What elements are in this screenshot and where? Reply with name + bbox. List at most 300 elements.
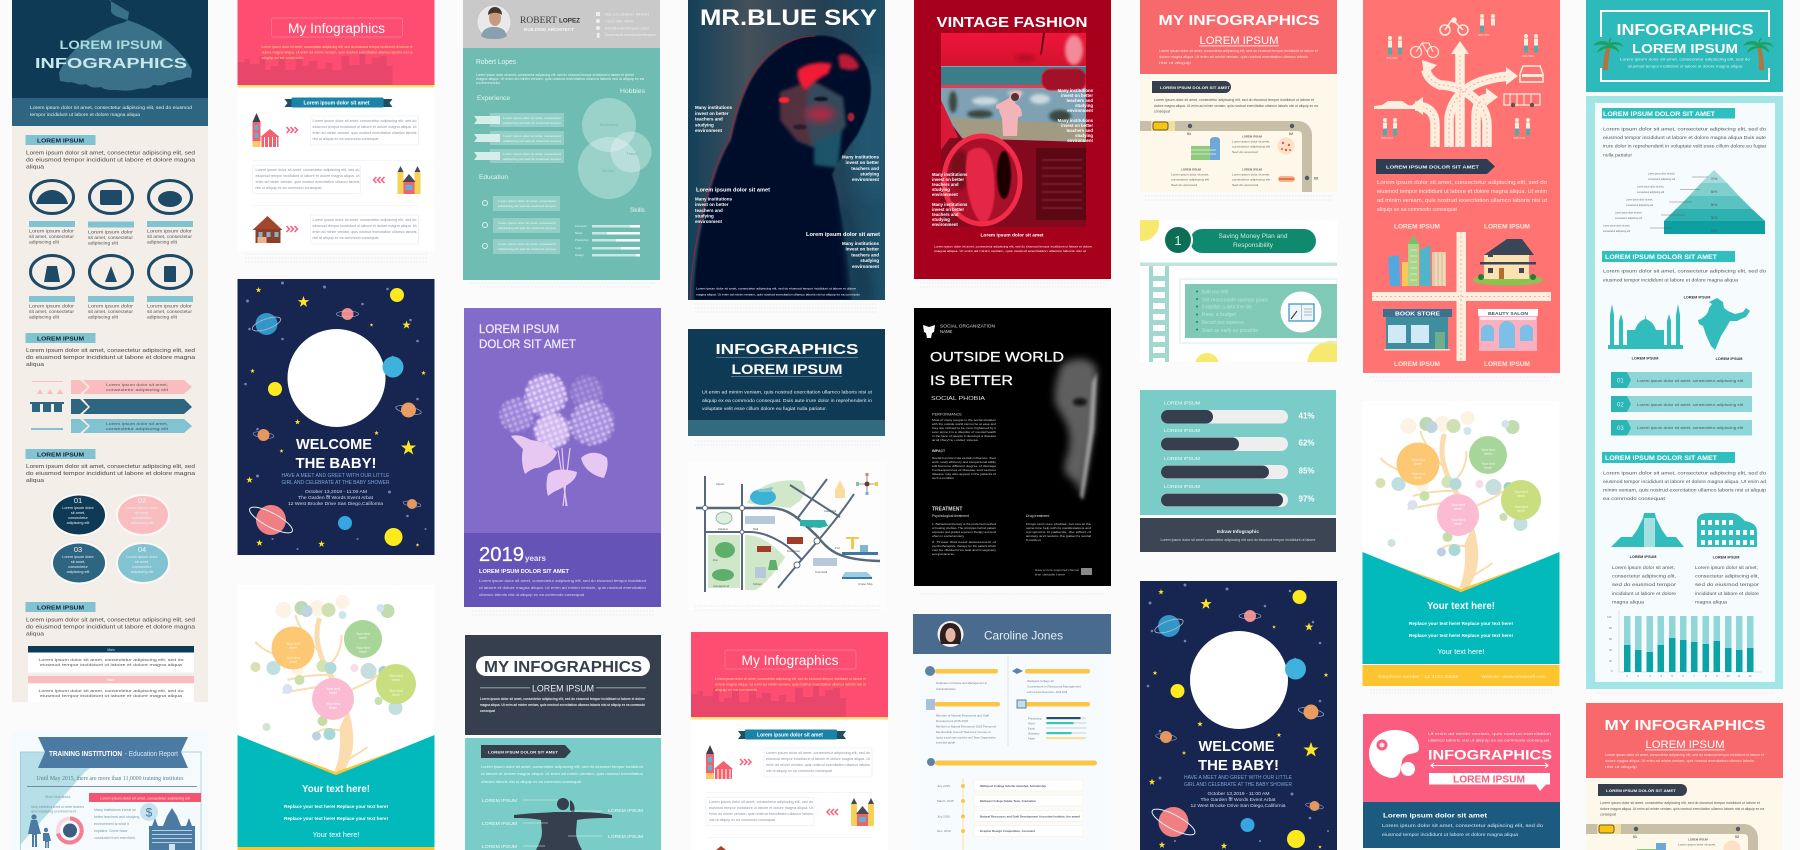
text box one: eiusmod tempor incididunt ut labore et dolore magna aliqua. Ut [312, 125, 417, 129]
pyramid chart: 30% [1711, 216, 1717, 220]
right captions: invest on better [1061, 123, 1093, 128]
icon: hot dog [1278, 176, 1295, 182]
bubble: green [344, 620, 382, 658]
planet: blue ringed [1153, 615, 1185, 637]
education list: Lorem ipsum dolor sit amet, consectetur [498, 199, 556, 203]
icon: pizza [1278, 138, 1294, 154]
left captions: Many institutions [932, 202, 968, 207]
speech box: LOREM IPSUM [1453, 774, 1525, 786]
contact details: facebook.com/robertlopez [605, 33, 657, 37]
yoga labels: LOREM IPSUM [482, 798, 517, 804]
intro band: tempor incididunt ut labore et dolore magna aliqua [30, 112, 141, 117]
section two heading and text: Lorem ipsum dolor sit amet, consectetur adipiscing elit, sed [26, 348, 195, 354]
text [702, 390, 873, 411]
bubble: lime [1501, 480, 1541, 520]
heading pill [1165, 227, 1316, 253]
bubble: orange [1396, 442, 1440, 486]
right captions: teachers and [1066, 98, 1093, 103]
headline: WELCOME [296, 436, 372, 453]
right caption bottom [806, 232, 880, 269]
intro text: Lorem ipsum dolor sit amet, consectetur adipiscing elit, sed do eiusmod tempor incididunt ut labore et dolore [480, 697, 645, 701]
numbered list [1611, 372, 1752, 436]
title: INFOGRAPHICS [1616, 22, 1754, 39]
list panel [1180, 279, 1337, 343]
small text: concluded from exercises [94, 836, 135, 840]
stacked bar chart: 100 [1607, 615, 1612, 619]
invitation text [1184, 775, 1293, 808]
heading one and text [1602, 108, 1767, 158]
name: BUILDING ARCHITECT [524, 27, 574, 32]
name: ROBERT [520, 15, 558, 25]
performance text: Most of many people in the social situation [932, 418, 996, 422]
icon: motorbike [1440, 18, 1468, 35]
double arrow [1431, 763, 1548, 768]
profile text: Skills [630, 208, 645, 214]
yoga labels: LOREM IPSUM [482, 844, 517, 850]
icon: lamp dome [59, 0, 192, 91]
bubble: lime: here! [1517, 509, 1525, 513]
right captions: Many institutions [1058, 88, 1094, 93]
stacked bar chart: 11 [1738, 674, 1741, 678]
name [520, 15, 580, 32]
title [1604, 717, 1766, 751]
text box one [310, 116, 418, 145]
impact text: disease may also appear in the patients of [932, 472, 996, 476]
stacked bar chart: 7 [1693, 674, 1695, 678]
intro text [1159, 49, 1318, 65]
road [1140, 126, 1307, 192]
icon: taj mahal [1608, 304, 1683, 349]
hobbies venn circles [578, 98, 652, 199]
icon: office buildings [1637, 843, 1666, 850]
landmark labels: LOREM IPSUM [1632, 356, 1658, 360]
bubble: orange [272, 626, 314, 670]
numbered circles 01 to 04: consectetur [68, 516, 89, 520]
section two heading and text [26, 333, 195, 368]
list panel: Record your expenses [1202, 320, 1244, 326]
cream text: dolore magna aliqua. Ut enim ad minim veniam, quis nostrud exercitation ullamco laboris nisi ut aliquip ex ea [1600, 807, 1764, 811]
ribbon heading: Lorem ipsum dolor sit amet [757, 732, 823, 738]
donut chart [58, 818, 82, 842]
right captions: invest on better [1061, 93, 1093, 98]
numbered circles 01 to 04: sit amet, [135, 560, 149, 564]
resume text [936, 679, 1081, 744]
landmark captions: LOREM IPSUM [1713, 556, 1739, 560]
landmark captions: sed do eiusmod tempor [1695, 582, 1759, 588]
banner: TRAINING INSTITUTION [49, 751, 122, 758]
lamp icon grid: sit amet, consectetur [29, 309, 75, 314]
route text blocks: LOREM IPSUM [1181, 168, 1202, 172]
pyramid chart: consectetur adipiscing elit [1626, 203, 1653, 207]
card: training institution education report [12, 732, 208, 850]
icons: people groups: 50% 50% [1513, 136, 1525, 140]
card: infographics lorem ipsum with map [688, 329, 885, 610]
headline: OUTSIDE WORLD [930, 348, 1064, 364]
left caption bottom [695, 188, 770, 224]
footer text: magna aliqua. Ut enim ad minim veniam, quis nostrud exercitation ullamco laboris nisi ut aliquip ex ea commodo [696, 292, 860, 296]
numbered circles 01 to 04: adipiscing elit [67, 521, 90, 525]
lamp icon grid: Lorem ipsum dolor [29, 228, 75, 234]
numbered circles 01 to 04: adipiscing elit [131, 521, 154, 525]
text box three: eiusmod tempor incididunt ut labore et dolore magna aliqua. Ut [312, 224, 417, 228]
intro band [12, 98, 208, 126]
title: MY INFOGRAPHICS [1158, 12, 1320, 29]
yoga labels: LOREM IPSUM [608, 808, 643, 814]
pyramid chart: Lorem ipsum dolor sit amet, [1648, 172, 1675, 176]
education list: Lorem ipsum dolor sit amet, consectetur [498, 242, 556, 246]
planet: orange small [1155, 731, 1177, 743]
experience list: Lorem ipsum dolor sit amet, consectetur [503, 134, 561, 138]
section one heading and text: aliqua [26, 164, 44, 170]
heading three and text: eiusmod tempor incididunt ut labore et dolore magna aliqua. Ut enim ad [1603, 479, 1766, 485]
bubble: orange: here! [289, 646, 297, 650]
pyramid chart: Lorem ipsum dolor sit amet, [1615, 210, 1642, 214]
icon: church [252, 113, 280, 147]
card: my infographics taxi route, column eight: 01 [1633, 835, 1637, 839]
arrows left [374, 177, 384, 183]
stars [1149, 589, 1328, 849]
city map: Downtown [787, 549, 801, 553]
treatment text: TREATMENT [932, 506, 962, 512]
card: my infographics taxi route, column six: 02 [1289, 132, 1293, 136]
skills chart: Excel [1028, 726, 1035, 730]
waypoints [1188, 124, 1309, 180]
category labels [1394, 224, 1530, 368]
resume text: Administration [936, 687, 956, 691]
intro text: Lorem ipsum dolor sit amet, consectetur adipiscing elit, sed do eiusmod tempor incididunt ut labore et [1159, 49, 1318, 53]
numbered circles 01 to 04: Lorem ipsum dolor [62, 555, 94, 559]
timeline: Graphic Design Competition, Assistant [980, 829, 1035, 833]
heading three and text: minim veniam, quis nostrud exercitation ullamco laboris nisi ut aliquip [1603, 488, 1766, 494]
city map: Cruise Ship [858, 582, 873, 586]
lamp icon grid: Lorem ipsum dolor [88, 304, 134, 308]
route text blocks [1171, 134, 1270, 187]
teal footer [238, 735, 434, 847]
planet: coral ringed [247, 503, 295, 537]
planet: blue small [338, 516, 352, 530]
yoga labels: LOREM IPSUM [482, 821, 517, 827]
road [1586, 829, 1753, 850]
right caption bottom: teachers and [851, 252, 879, 258]
card: welcome the baby, column six [1140, 581, 1337, 850]
city map: Mall [753, 527, 759, 531]
yellow planets [1170, 590, 1306, 848]
stacked bar chart: 9 [1716, 674, 1718, 678]
treatment text: same time help with its manifestations and [1026, 526, 1091, 530]
heading one and text: irure dolor in reprehenderit in voluptate velit esse cillum dolore eu fugiat [1603, 144, 1767, 150]
section three heading and text [26, 449, 195, 484]
treatment text: can be divided into real and imaginary [932, 548, 997, 552]
numbered list: Lorem ipsum dolor sit amet, consectetur adipiscing elit [1637, 378, 1744, 383]
route text blocks: LOREM IPSUM [1242, 134, 1263, 138]
icon: dollar [140, 803, 158, 821]
bubble: lime: here! [392, 693, 400, 697]
arrows right [740, 759, 751, 765]
bubble: green: Your text [356, 632, 370, 636]
headline: LOREM IPSUM [479, 322, 559, 336]
title: LOREM IPSUM [1632, 41, 1738, 56]
invitation text: HAVE A MEET AND GREET WITH OUR LITTLE [1184, 775, 1293, 781]
resume text: Member of Natural Resources and Staff [936, 714, 989, 718]
body text: Lorem ipsum dolor sit amet, consectetur adipiscing elit, sed do [1377, 180, 1547, 186]
route text blocks: Sed do eiusmod [1232, 150, 1258, 154]
card: saving money plan [1140, 220, 1337, 362]
profile text: Hobbies [620, 89, 645, 95]
skills bars: Music [575, 231, 583, 235]
teal text: ullamco laboris nisi ut aliquip ex ea commodo consequat [481, 780, 582, 784]
planet: orange small [253, 429, 274, 441]
timeline: Wellspect College Scholar Awarded, Scholarship [980, 784, 1046, 788]
landmark captions: Lorem ipsum dolor sit amet, [1612, 565, 1675, 571]
performance text: they are inclined to be more frightened by it [932, 426, 996, 430]
section four heading and text [26, 602, 195, 638]
lamp icon grid: Lorem ipsum dolor [29, 304, 75, 308]
section one heading and text: Lorem ipsum dolor sit amet, consectetur adipiscing elit, sed [26, 150, 195, 156]
right captions: studying [1075, 133, 1093, 138]
impact text [932, 449, 997, 480]
treatment text: symptoms in patients, the effect of [1026, 530, 1091, 534]
landmark labels: LOREM IPSUM [1716, 357, 1742, 361]
subheading: SOCIAL PHOBIA [931, 396, 985, 402]
route text blocks: consectetur adipiscing elit [1232, 144, 1270, 148]
route text blocks: consectetur adipiscing elit [1232, 178, 1270, 182]
name: LOPEZ [559, 18, 580, 24]
icon: beauty salon: BEAUTY SALON [1488, 311, 1528, 316]
section four heading and text: LOREM IPSUM [37, 605, 84, 611]
tag heading: LOREM IPSUM DOLOR SIT AMET [488, 750, 559, 754]
photo: portrait [688, 0, 900, 300]
icon: step pyramid [1611, 513, 1684, 547]
text box two: enim ad minim veniam, quis nostrud exercitation ullamco laboris [256, 180, 360, 184]
route text blocks: Lorem ipsum dolor sit amet, [1171, 172, 1209, 176]
skills bars: Computer [575, 224, 587, 228]
text box two: eiusmod tempor incididunt ut labore et dolore magna aliqua. Ut [709, 806, 813, 810]
text box one [764, 748, 872, 777]
education list: Lorem ipsum dolor sit amet, consectetur [498, 221, 556, 225]
right caption top [842, 154, 879, 182]
footer text: Your text here! [1427, 601, 1495, 612]
landmark captions: magna aliqua [1612, 600, 1644, 606]
icon: palm right [1743, 38, 1774, 70]
stacked bar chart: 12 [1748, 674, 1752, 678]
footer text [934, 232, 1092, 253]
lamp icon grid: adipiscing elit [88, 240, 119, 246]
small text: better teachers and studying [94, 815, 139, 819]
photo placeholder circle [1190, 631, 1288, 729]
icon: india map [1698, 298, 1750, 350]
subtitle: Until May 2015, there are more than 11,0000 training institutes [36, 775, 184, 782]
footer: Lorem ipsum dolor sit amet consectetur adipiscing elit sed do eiusmod tempor incididunt ut labore [1160, 538, 1316, 542]
treatment text: 2. Those that need assessment of [932, 540, 996, 544]
pyramid chart: 50% [1711, 190, 1717, 194]
card: lilac poster [464, 308, 661, 615]
text box one: Lorem ipsum dolor sit amet, consectetur adipiscing elit, sed do [312, 119, 417, 123]
planet: orange ringed [1298, 704, 1324, 720]
landmark captions: incididunt ut labore et dolore [1695, 591, 1759, 597]
small text: explains. Some have [94, 829, 127, 833]
icons: people groups: 50% 50% [1381, 136, 1393, 140]
numbered circles 01 to 04: 04 [138, 545, 146, 554]
timeline: Wellspect College Debate Team, Graduation [980, 799, 1036, 803]
section two heading and text: LOREM IPSUM [37, 336, 84, 342]
left caption top [695, 105, 732, 133]
text box two: Lorem ipsum dolor sit amet, consectetur adipiscing elit, sed do [709, 800, 813, 804]
landmark captions: magna aliqua [1695, 600, 1727, 606]
planet: pink small [336, 308, 358, 320]
icon: office buildings [1191, 137, 1220, 160]
city map: Town Hall [815, 570, 828, 574]
left caption top: invest on better [695, 111, 729, 116]
stacked bar chart: 3 [1649, 674, 1651, 678]
icon: car [1520, 66, 1543, 82]
photo placeholder circle [288, 329, 386, 427]
heading two and text: LOREM IPSUM DOLOR SIT AMET [1605, 255, 1717, 261]
red heading bar: Lorem ipsum dolor sit amet, consectetur adipiscing elit [100, 796, 191, 800]
text box two: eiusmod tempor incididunt ut labore et dolore magna aliqua. Ut [256, 174, 360, 178]
table: Main [107, 678, 115, 682]
stacked bar chart: 0 [1611, 669, 1613, 673]
right captions: Many institutions [1058, 118, 1094, 123]
contact bar: Website : www.edrawsoft.com [1482, 674, 1546, 679]
pyramid chart: 70% [1711, 177, 1717, 181]
progress rows: 41% [1298, 412, 1315, 420]
text box one: enim ad minim veniam, quis nostrud exercitation ullamco laboris [312, 131, 417, 135]
impact text: work, study efficiency and interpersonal ability [932, 460, 997, 464]
stacked bar chart: 2 [1637, 674, 1639, 678]
hobbies venn circles: Basketball [600, 122, 618, 127]
photo: face in shadow [1055, 359, 1097, 500]
background dots [1147, 584, 1329, 842]
ribbon heading [284, 98, 392, 108]
contact bar: Telephone number : 12 3123 45689 [1378, 674, 1459, 679]
arrow list: Lorem ipsum dolor sit amet, [106, 422, 168, 426]
card: my infographics pink, column four [691, 632, 888, 850]
bubble: pink: here! [1454, 522, 1462, 526]
planet: pink small [1239, 610, 1261, 622]
profile text: commodo [476, 81, 500, 85]
treatment text: Drug treatment [1026, 514, 1049, 518]
text box two: nisi ut aliquip ex ea commodo consequat [256, 186, 322, 190]
headline: THE BABY! [1198, 757, 1279, 774]
bubble: lime: here! [392, 678, 400, 682]
education list: adipiscing elit sed do eiusmod tempor [498, 204, 556, 208]
treatment text: 1. Behavioral therapy is the preferred method [932, 522, 996, 526]
left caption top: Many institutions [695, 105, 732, 110]
background dots [244, 282, 426, 550]
lamp icon grid: adipiscing elit [147, 240, 178, 244]
headline [1198, 738, 1279, 774]
avatar [477, 5, 511, 39]
intro text: Lorem ipsum dolor sit amet, consectetur adipiscing elit, sed do eiusmod tempor incididunt ut labore et [1605, 753, 1764, 757]
tree [250, 595, 402, 775]
heading pill: 1 [1174, 233, 1182, 248]
planet: coral ringed [1149, 805, 1198, 839]
left captions [932, 172, 968, 227]
section four heading and text: aliqua [26, 632, 44, 638]
intro text: Lorem ipsum dolor sit amet, consectetur adipiscing elit, sed do eiusmod tempor incididunt ut labore et [715, 677, 866, 681]
icons: people groups: 50% 50% [1386, 56, 1398, 60]
icon: taxi [1151, 121, 1175, 131]
invitation text: October 13,2019 - 11:00 AM [1208, 791, 1270, 796]
category labels: LOREM IPSUM [1484, 362, 1530, 368]
icon: city skyline [1388, 235, 1446, 286]
landmark labels: LOREM IPSUM [1684, 296, 1710, 300]
pyramid chart: consectetur adipiscing elit [1615, 216, 1642, 220]
pyramid chart: 20% [1711, 229, 1717, 233]
skills bars: Design [575, 253, 584, 257]
lamp icon grid: adipiscing elit [88, 314, 119, 320]
stacked bar chart: 4 [1660, 674, 1662, 678]
impact text: such a condition [932, 476, 954, 480]
left captions: studying [932, 187, 950, 192]
route text blocks: consectetur adipiscing elit [1171, 178, 1209, 182]
stacked bar chart [1607, 610, 1762, 678]
title: MY INFOGRAPHICS [1604, 717, 1766, 734]
resume text: Membership Council Task Hour Course on [936, 730, 991, 734]
section icons [925, 666, 1026, 766]
headline [930, 348, 1064, 388]
table: Lorem ipsum dolor sit amet, consectetur adipiscing elit, sed do [38, 688, 185, 693]
section one heading and text: do eiusmod tempor incididunt ut labore et dolore magna [26, 158, 195, 164]
icon: flower bouquet [499, 373, 615, 506]
timeline: July 2015 [937, 784, 950, 788]
bubble: pink: Your text [1451, 518, 1465, 522]
landmark captions: sed do eiusmod tempor [1612, 582, 1676, 588]
title: lorem ipsum infographics [35, 40, 187, 72]
lamp icon grid: sit amet, consectetur [29, 234, 75, 239]
card: vintage fashion poster [914, 0, 1111, 287]
numbered list: 02 [1617, 402, 1624, 408]
pyramid chart: consectetur adipiscing elit [1603, 229, 1630, 233]
card: lamp infographic [12, 0, 208, 702]
tree [1376, 411, 1528, 591]
numbered circles 01 to 04: adipiscing elit [131, 570, 154, 574]
numbered circles 01 to 04: consectetur [132, 516, 153, 520]
logo: NAME [940, 329, 953, 334]
text box three: nisi ut aliquip ex ea commodo consequat [312, 236, 379, 240]
tag heading: LOREM IPSUM DOLOR SIT AMET [1386, 164, 1479, 170]
planet: blue small [1240, 818, 1254, 832]
footer text: Your text here! [302, 784, 370, 795]
lamp icon grid: sit amet, consectetur [88, 309, 134, 314]
card: Mr Blue Sky poster [688, 0, 900, 312]
profile text: magna aliqua. Ut enim ad minim veniam, quis nostrud exercitation ullamco laboris nisi ut aliquip ex ea [476, 77, 644, 81]
performance text: ever since it is a disorder of mental health [932, 430, 996, 434]
experience list: adipiscing elit sed do eiusmod tempor [503, 139, 561, 143]
year: 2019 [479, 544, 524, 566]
intro text: Lorem ipsum dolor sit amet, consectetur adipiscing elit, sed do eiusmod tempor incididunt ut labore et [262, 45, 413, 49]
header [913, 614, 1111, 654]
intro text: aliquip ex ea commodo [715, 688, 757, 692]
arrow list [30, 380, 192, 433]
skills chart: Photoshop [1028, 716, 1042, 720]
heading two and text: eiusmod tempor incididunt ut labore et dolore magna aliqua [1603, 278, 1738, 284]
cream text: Lorem ipsum dolor sit amet, consectetur adipiscing elit, sed do eiusmod tempor incididunt ut labore et [1600, 801, 1760, 805]
stacked bar chart: 40 [1609, 648, 1612, 652]
invitation text: 12 West Brooke Drive San Diego,California [1190, 803, 1286, 808]
bubble: green [1469, 436, 1507, 474]
invitation text: GIRL AND CELEBRATE AT THE BABY SHOWER [282, 480, 390, 486]
category labels: LOREM IPSUM [1484, 224, 1530, 230]
invitation text: HAVE A MEET AND GREET WITH OUR LITTLE [282, 473, 390, 479]
yellow blobs [1140, 220, 1337, 362]
arrows right [286, 127, 298, 133]
small text: and studying environment [31, 810, 76, 814]
route text block [1678, 838, 1716, 846]
intro text: nisi ut aliquip [1605, 765, 1637, 769]
left caption top: teachers and [695, 116, 723, 122]
icon: bus [1504, 94, 1540, 107]
